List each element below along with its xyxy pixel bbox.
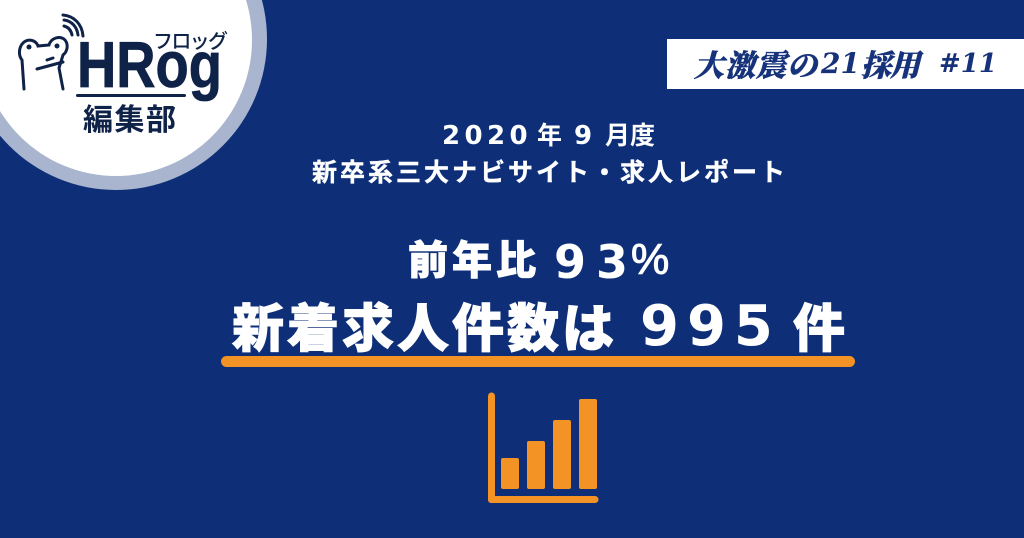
year-on-year headline: 前年比 [408, 228, 540, 286]
badge white disc [0, 0, 252, 176]
year-on-year headline: 93 [554, 235, 638, 289]
report date: 年 [537, 116, 562, 152]
new listings headline [232, 287, 845, 362]
new listings headline: 件 [793, 287, 845, 362]
report date: 月度 [605, 116, 655, 152]
new listings headline: 新着求人件数は [232, 287, 617, 362]
year-on-year headline: % [631, 236, 669, 284]
logo rule [76, 94, 186, 97]
series title: 採用 [861, 41, 919, 85]
logo wordmark: HRog [77, 28, 222, 101]
bar 3 [553, 420, 571, 489]
bar 1 [501, 458, 519, 489]
orange underline [221, 356, 855, 367]
logo katakana: フロッグ [153, 25, 228, 54]
report date [442, 116, 655, 152]
bar 2 [527, 441, 545, 489]
icon: bar chart [488, 392, 598, 503]
year-on-year headline [408, 228, 669, 289]
report date: 2020 [442, 121, 532, 151]
new listings headline: 995 [640, 294, 781, 359]
icon: frog with wifi arcs [19, 15, 83, 89]
chart axes [488, 392, 598, 503]
bar 4 [579, 399, 597, 489]
logo badge [0, 0, 267, 190]
report name: 新卒系三大ナビサイト・求人レポート [312, 153, 788, 189]
series title: #11 [939, 49, 997, 79]
series title: 21 [821, 47, 860, 80]
report date: 9 [574, 121, 592, 151]
series title: 大激震の [694, 41, 818, 85]
logo department name: 編集部 [83, 95, 176, 139]
badge ring [0, 0, 267, 190]
series title [694, 41, 997, 85]
series banner [667, 39, 1024, 89]
